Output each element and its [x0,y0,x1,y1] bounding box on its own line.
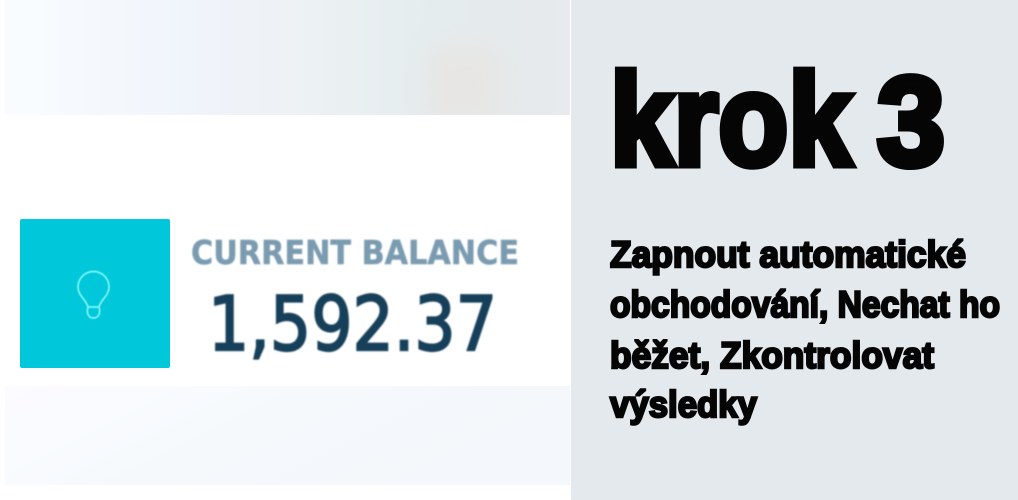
text block: step description: běžet, Zkontrolovat [610,335,934,376]
panel: blurred top strip [54,0,570,115]
text block: step description: Zapnout automatické [610,234,966,275]
panel: right text column [571,0,1018,500]
panel: blurred bottom strip [5,386,570,485]
text block: step description: výsledky [610,384,757,425]
text block: step description [610,234,1000,425]
panel: balance widget [20,219,519,368]
value: balance amount: 1,592.37 [208,280,497,368]
heading: krok 3: krok [610,46,852,193]
icon: teal tile with light bulb [20,219,170,368]
label: current balance: CURRENT BALANCE [191,233,519,272]
heading: krok 3: 3 [877,51,945,192]
